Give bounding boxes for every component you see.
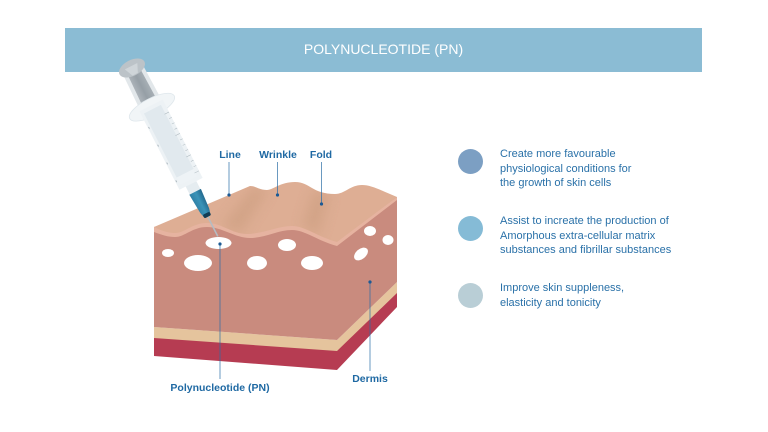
barrel scale marks (165, 112, 199, 173)
plunger rod (128, 70, 159, 111)
benefit text 2: Assist to increate the production of (500, 215, 669, 227)
leader lines (218, 162, 372, 379)
tan fat layer (154, 282, 397, 351)
bullet dot 3 (458, 283, 483, 308)
barrel (139, 100, 203, 190)
red base layer (154, 291, 397, 370)
dermis layer (154, 197, 397, 340)
diagram labels: Wrinkle (259, 149, 297, 161)
bullet dot 1 (458, 149, 483, 174)
benefit text 1 (500, 148, 632, 189)
polynucleotide pointer (218, 242, 222, 379)
header banner: POLYNUCLEOTIDE (PN) (304, 41, 463, 57)
epidermis lip (154, 197, 397, 246)
polynucleotide deposits (162, 226, 394, 271)
diagram labels: Line (219, 149, 241, 161)
diagram labels (170, 149, 388, 394)
wrinkle pointer (276, 162, 279, 197)
benefit text 3: elasticity and tonicity (500, 296, 601, 308)
top skin surface (154, 182, 397, 242)
benefit text 1: Create more favourable (500, 148, 616, 160)
diagram labels: Polynucleotide (PN) (170, 382, 270, 394)
benefit text 2: Amorphous extra-cellular matrix (500, 230, 655, 242)
diagram labels: Fold (310, 149, 332, 161)
benefit text 2: substances and fibrillar substances (500, 244, 671, 256)
bullet dot 2 (458, 216, 483, 241)
plunger sleeve (122, 64, 163, 113)
diagram labels: Dermis (352, 373, 388, 385)
surface fold shading (229, 186, 326, 229)
benefit text 2 (500, 215, 671, 256)
header banner (65, 28, 702, 72)
benefit text 3: Improve skin suppleness, (500, 282, 624, 294)
fold pointer (320, 162, 323, 206)
benefit text 3 (500, 282, 624, 308)
benefit text 1: the growth of skin cells (500, 177, 611, 189)
finger flange (126, 88, 178, 127)
needle hub (189, 189, 213, 219)
syringe (106, 50, 240, 248)
plunger top flange (116, 55, 148, 81)
needle (204, 210, 219, 237)
dermis pointer (368, 280, 372, 371)
skin block (154, 182, 397, 370)
line pointer (227, 162, 231, 197)
benefit text 1: physiological conditions for (500, 162, 631, 174)
skin diagram with syringe and labels (119, 58, 397, 393)
